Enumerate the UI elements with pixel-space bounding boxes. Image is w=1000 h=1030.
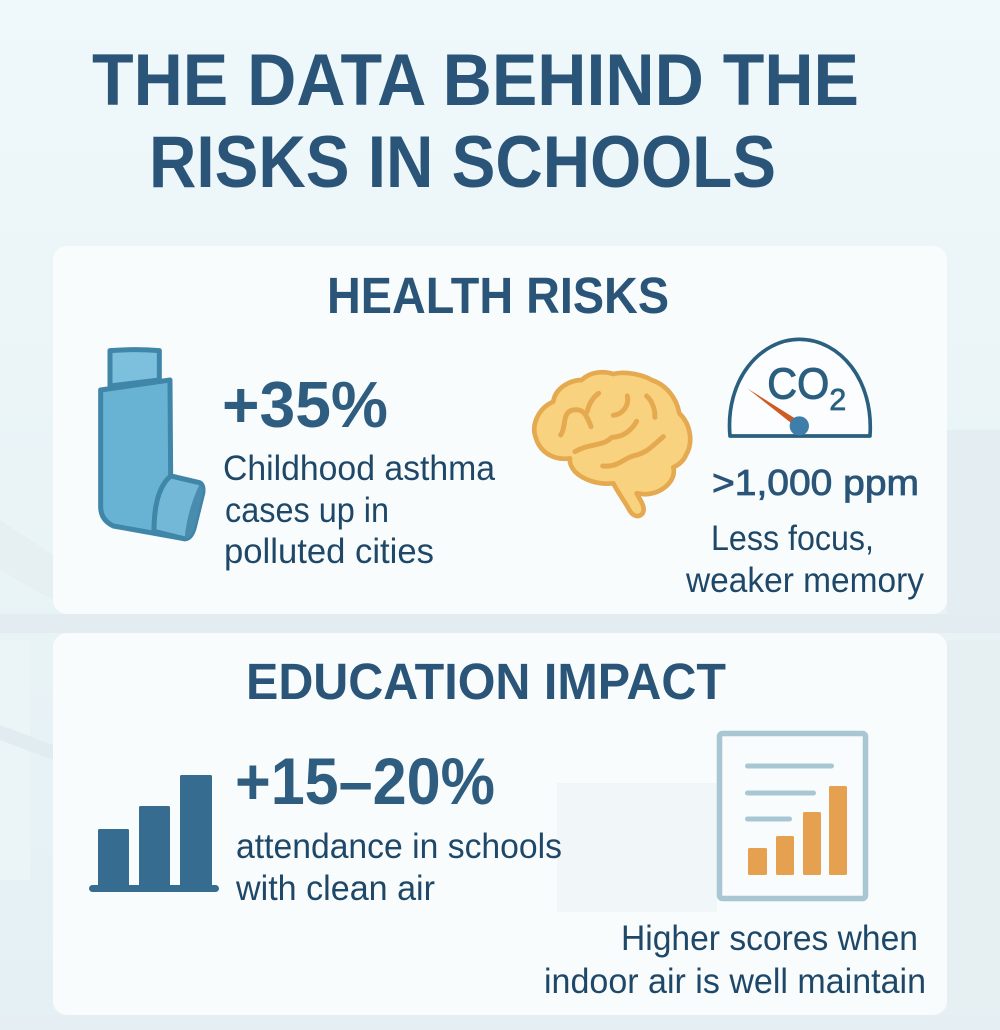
- icon: bar chart: [89, 775, 219, 892]
- icon: CO2 gauge: 2: [829, 383, 846, 417]
- text: attendance: [235, 827, 562, 908]
- icon: report: [720, 734, 866, 898]
- text: asthma: [223, 449, 496, 571]
- heading: health risks: HEALTH RISKS: [327, 267, 669, 324]
- icon: inhaler: [101, 350, 203, 539]
- text: asthma: Childhood asthma: [223, 449, 496, 488]
- panel: education impact: [53, 633, 947, 1015]
- text: focus: Less focus,: [711, 519, 874, 558]
- title: [92, 40, 859, 203]
- heading: education impact: EDUCATION IMPACT: [246, 653, 726, 710]
- stat: ppm: >1,000 ppm: [712, 462, 919, 503]
- text: asthma: polluted cities: [224, 532, 434, 571]
- text: focus: weaker memory: [685, 561, 924, 600]
- text: attendance: with clean air: [235, 869, 435, 908]
- stat: +35%: +35%: [222, 368, 388, 441]
- title: RISKS IN SCHOOLS: [149, 122, 776, 203]
- text: attendance: attendance in schools: [236, 827, 562, 866]
- text: focus: [685, 519, 924, 600]
- text: scores: Higher scores when: [621, 919, 918, 958]
- title: THE DATA BEHIND THE: [92, 40, 859, 121]
- stat: attendance: +15–20%: [235, 744, 495, 818]
- text: scores: [544, 919, 926, 1001]
- icon: brain: [534, 372, 690, 516]
- icon: CO2 gauge: CO: [767, 359, 829, 408]
- panel: health risks: [53, 246, 947, 614]
- icon: CO2 gauge: [730, 339, 870, 436]
- text: scores: indoor air is well maintain: [544, 962, 926, 1001]
- text: asthma: cases up in: [225, 491, 389, 530]
